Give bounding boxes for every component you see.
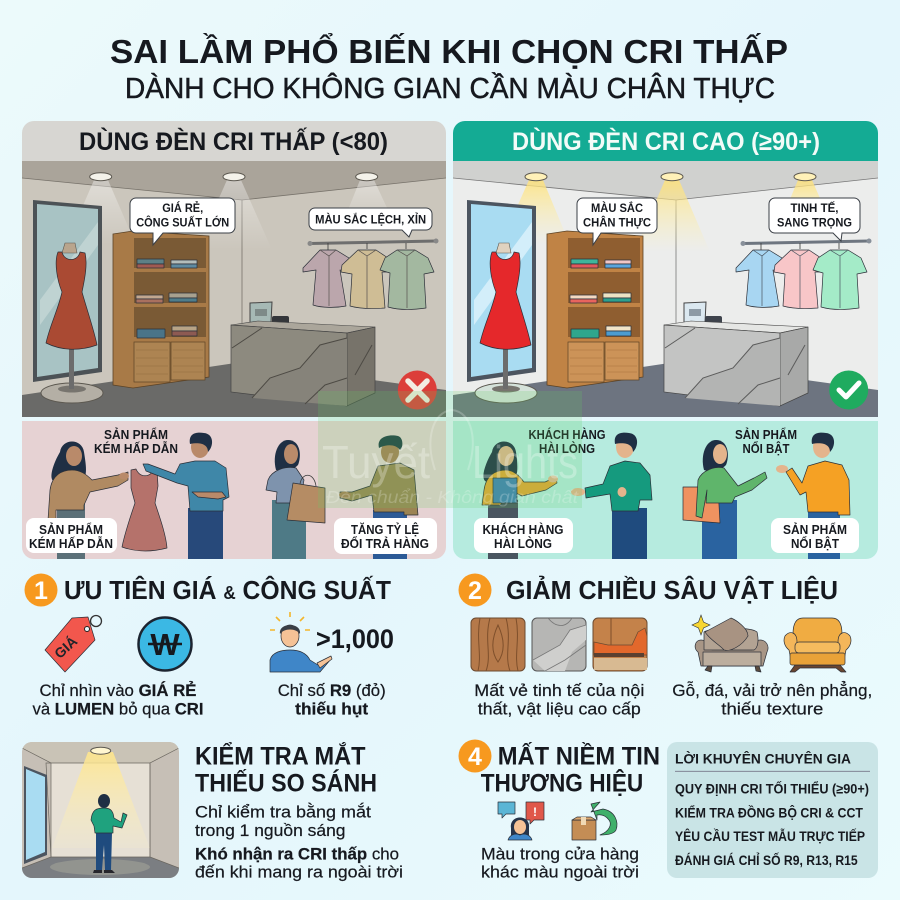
advice list: YÊU CẦU TEST MẪU TRỰC TIẾP (675, 829, 865, 844)
mirror (467, 200, 536, 382)
panel: expert advice (667, 742, 878, 878)
badge: higher returns (334, 518, 437, 554)
woman with orange bag (683, 440, 767, 560)
heading 2: GIẢM CHIỀU SÂU VẬT LIỆU (506, 575, 838, 605)
text: visual check: Khó nhận ra CRI thấp cho (195, 844, 399, 863)
folded clothes (570, 259, 631, 338)
text: flat materials: Gỗ, đá, vải trở nên phẳng, (672, 681, 872, 700)
icon: dull sofa with sparkle (692, 615, 768, 672)
counter (664, 302, 808, 406)
callout: cheap, high power (130, 198, 235, 245)
man in orange (776, 433, 850, 560)
shelf (113, 231, 209, 388)
panel: high CRI store (453, 121, 878, 417)
watermark: Lights (472, 436, 578, 488)
title (110, 33, 788, 105)
lamps (90, 173, 378, 181)
icon: watt circle (138, 618, 192, 670)
strip: customer reactions under low CRI (22, 421, 446, 560)
badge: satisfied customer: KHÁCH HÀNG (482, 522, 564, 537)
text: subtle material loss (474, 681, 644, 718)
section 2: reduced material depth (458, 574, 872, 718)
number badge 1 (24, 574, 58, 606)
panel: low CRI store (22, 121, 446, 417)
label: product stands out (top) (735, 427, 797, 456)
header: low CRI (22, 121, 446, 161)
badge: product stands out (771, 518, 859, 553)
watermark: Tuyết (322, 436, 430, 488)
scene: bright store (453, 161, 878, 417)
text: R9 shortfall: Chỉ số R9 (đỏ) (278, 681, 386, 700)
number badge 2: 2 (468, 577, 482, 605)
icon: customer with complaints (498, 802, 544, 840)
text: colour mismatch (481, 844, 639, 882)
label: product stands out (top): SẢN PHẨM (735, 427, 797, 442)
main heading: SAI LẦM PHỔ BIẾN KHI CHỌN CRI THẤP (110, 33, 788, 70)
illustration: room with spotlight (22, 742, 179, 878)
shelf (547, 231, 643, 388)
lamps (525, 173, 816, 181)
number badge 1: 1 (34, 577, 48, 605)
heading 4 (481, 741, 660, 798)
number badge 2 (458, 574, 492, 606)
badge: product stands out: NỔI BẬT (791, 536, 839, 551)
text: colour mismatch: khác màu ngoài trời (481, 863, 639, 882)
callout: refined, luxurious: TINH TẾ, (790, 200, 838, 215)
icon: vibrant armchair (784, 618, 851, 672)
man looking at wall (91, 794, 127, 873)
heading 4: THƯƠNG HIỆU (481, 768, 643, 798)
badge: unattractive product: KÉM HẤP DẪN (29, 536, 113, 551)
text: flat materials (672, 681, 872, 718)
icon: price tag: GIÁ (51, 633, 80, 662)
text: visual check: Chỉ kiểm tra bằng mắt (195, 802, 371, 821)
heading 1: ƯU TIÊN GIÁ & CÔNG SUẤT (64, 575, 391, 605)
text: colour mismatch: Màu trong cửa hàng (481, 844, 639, 863)
label: satisfied customer (top): KHÁCH HÀNG (528, 427, 606, 442)
woman judging dress (48, 442, 129, 560)
label: unattractive product (top): SẢN PHẨM (104, 427, 168, 442)
section 4: loss of brand trust (458, 740, 660, 882)
heading 3: KIỂM TRA MẮT (195, 740, 366, 770)
text: subtle material loss: thất, vật liệu cao cấp (478, 699, 641, 718)
text: flat materials: thiếu texture (721, 699, 823, 718)
label: satisfied customer (top) (528, 427, 606, 456)
badge: unattractive product: SẢN PHẨM (39, 522, 103, 537)
number badge 4: 4 (468, 743, 482, 771)
advice list (675, 781, 869, 868)
section 3: visual check without comparison (22, 740, 403, 882)
label: product stands out (top): NỔI BẬT (742, 441, 790, 456)
text: R9 shortfall (278, 681, 386, 718)
sub heading: DÀNH CHO KHÔNG GIAN CẦN MÀU CHÂN THỰC (125, 71, 775, 105)
heading 4: MẤT NIỀM TIN (498, 741, 660, 770)
text: subtle material loss: Mất vẻ tinh tế của nội (474, 681, 644, 700)
icon: customer with complaints: ! (533, 805, 537, 819)
header: high CRI (453, 121, 878, 161)
x mark (398, 370, 437, 410)
icon: person with number: >1,000 (316, 624, 394, 654)
callout: true colours (577, 198, 657, 245)
strip: customer reactions under high CRI (453, 421, 878, 560)
text: visual check (195, 802, 403, 882)
tile: stone (532, 618, 586, 671)
callout: refined, luxurious (769, 198, 860, 241)
badge: product stands out: SẢN PHẨM (783, 522, 847, 537)
callout: true colours: CHÂN THỰC (583, 214, 651, 230)
check mark (829, 370, 868, 410)
number badge 4 (458, 740, 492, 772)
tile: wood (471, 618, 525, 671)
man holding dress (143, 433, 229, 560)
scene: dim store (22, 161, 446, 417)
folded clothes (136, 259, 197, 338)
happy woman with folder (482, 442, 558, 560)
man with thumbs up (571, 433, 652, 560)
callout: cheap, high power: CÔNG SUẤT LỚN (136, 214, 229, 230)
badge: satisfied customer (474, 518, 573, 553)
callout: cheap, high power: GIÁ RẺ, (162, 200, 203, 215)
icon: returned box (572, 802, 617, 840)
icon: price tag (45, 616, 102, 672)
tile: fabric sofa (593, 618, 647, 671)
icon: person with number (270, 612, 394, 672)
callout: true colours: MÀU SẮC (591, 200, 643, 215)
clothes rail and shirts (303, 238, 438, 309)
badge: higher returns: ĐỔI TRẢ HÀNG (341, 536, 429, 551)
advice heading: LỜI KHUYÊN CHUYÊN GIA (675, 749, 851, 766)
mannequin with dress (41, 243, 103, 403)
advice list: ĐÁNH GIÁ CHỈ SỐ R9, R13, R15 (675, 853, 858, 868)
heading 3 (195, 740, 377, 798)
label: unattractive product (top) (94, 427, 178, 456)
icon: watt circle: W (150, 627, 180, 662)
text: price and lumen: Chỉ nhìn vào GIÁ RẺ (40, 681, 196, 700)
mannequin with red dress (475, 243, 537, 403)
badge: higher returns: TĂNG TỶ LỆ (351, 522, 419, 537)
text: R9 shortfall: thiếu hụt (295, 699, 369, 718)
mirror (33, 200, 102, 382)
badge: satisfied customer: HÀI LÒNG (494, 536, 552, 551)
label: satisfied customer (top): HÀI LÒNG (539, 441, 595, 456)
watermark (318, 391, 582, 508)
advice list: KIỂM TRA ĐỒNG BỘ CRI & CCT (675, 805, 864, 820)
text: price and lumen (32, 681, 204, 718)
dull dress (122, 469, 167, 551)
watermark: Đèn chuẩn - Không gian chất (326, 487, 579, 507)
label: unattractive product (top): KÉM HẤP DẪN (94, 441, 178, 456)
callout: colour shift (309, 208, 432, 237)
clothes rail and colourful shirts (736, 238, 872, 309)
woman with bag (266, 440, 325, 560)
man showing returns (339, 435, 418, 560)
counter (231, 302, 375, 406)
advice list: QUY ĐỊNH CRI TỐI THIỂU (≥90+) (675, 781, 869, 796)
section 1: price and wattage (24, 574, 394, 718)
badge: unattractive product (26, 518, 117, 553)
heading 3: THIẾU SO SÁNH (195, 769, 377, 798)
header: low CRI: DÙNG ĐÈN CRI THẤP (<80) (79, 126, 388, 156)
header: high CRI: DÙNG ĐÈN CRI CAO (≥90+) (512, 126, 820, 156)
text: visual check: trong 1 nguồn sáng (195, 821, 346, 840)
callout: colour shift: MÀU SẮC LỆCH, XỈN (315, 211, 426, 226)
callout: refined, luxurious: SANG TRỌNG (777, 216, 852, 230)
text: visual check: đến khi mang ra ngoài trời (195, 863, 403, 882)
text: price and lumen: và LUMEN bỏ qua CRI (32, 699, 204, 718)
